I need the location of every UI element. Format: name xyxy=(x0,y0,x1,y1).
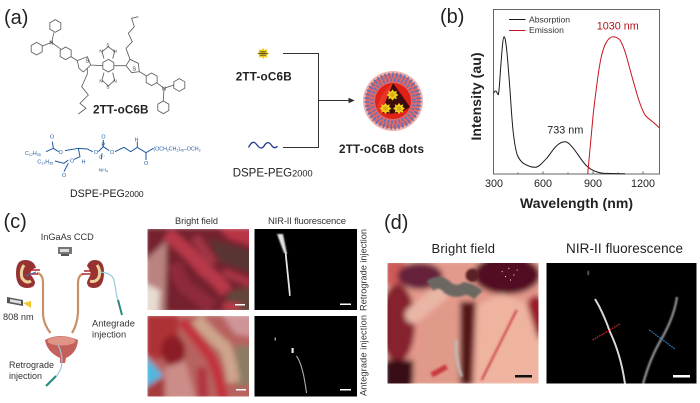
chemical structure: 2TT-oC6B: N xyxy=(99,49,103,54)
photo: NIR antegrade xyxy=(254,316,357,396)
ureter signal left xyxy=(595,299,625,384)
chemical structure: DSPE-PEG2000: O xyxy=(70,159,74,165)
label: Retrograde injection: Retrograde xyxy=(9,360,54,370)
ureter right xyxy=(72,274,83,333)
chemical structure: DSPE-PEG2000: H xyxy=(33,151,37,157)
emission curve xyxy=(588,37,659,174)
chemical structure: 2TT-oC6B: N xyxy=(162,87,166,93)
absorption curve xyxy=(494,37,625,174)
chemical structure: 2TT-oC6B: S xyxy=(106,85,109,90)
chemical structure: DSPE-PEG2000: 35 xyxy=(49,161,53,165)
chart frame and ticks xyxy=(494,10,660,174)
ureter left xyxy=(37,273,50,333)
chemical structure: DSPE-PEG2000: NH xyxy=(99,168,106,174)
panel label (d): (d) xyxy=(384,212,408,234)
icon: 2TT-oC6B molecule star xyxy=(257,48,269,59)
icon: CCD camera xyxy=(58,247,72,256)
chemical structure: DSPE-PEG2000: O xyxy=(94,150,98,156)
chemical structure: 2TT-oC6B: N xyxy=(113,79,117,84)
chemical structure: DSPE-PEG2000: H xyxy=(82,159,86,165)
x axis title: Wavelength (nm) xyxy=(520,195,633,211)
chemical structure: DSPE-PEG2000: ) xyxy=(178,147,180,153)
scale bar xyxy=(340,389,351,390)
chemical structure: DSPE-PEG2000: C xyxy=(37,159,41,165)
chemical structure: DSPE-PEG2000: 3 xyxy=(199,149,201,153)
chemical structure: 2TT-oC6B: S xyxy=(132,67,136,73)
label: DSPE-PEG2000: DSPE-PEG2000 xyxy=(233,168,313,180)
compound name: DSPE-PEG2000: DSPE-PEG2000 xyxy=(70,188,144,200)
chemical structure: DSPE-PEG2000: H xyxy=(45,159,49,165)
chemical structure: DSPE-PEG2000: 45 xyxy=(180,149,184,153)
photo: bright field xyxy=(388,263,538,384)
panel: (a) synthesis scheme xyxy=(4,7,424,200)
chemical structure: DSPE-PEG2000: O xyxy=(62,173,66,179)
peak label: 1030 nm: 1030 nm xyxy=(597,20,639,32)
x tick labels: 300 xyxy=(485,178,503,190)
arrow: bracket merging both components into dots xyxy=(283,54,354,148)
heading: NIR-II fluorescence: NIR-II fluorescence xyxy=(566,241,683,256)
photo: NIR retrograde xyxy=(254,229,357,310)
heading: Bright field: Bright field xyxy=(432,241,495,256)
compound name: 2TT-oC6B: 2TT-oC6B xyxy=(93,104,148,116)
chemical structure: 2TT-oC6B xyxy=(31,17,185,114)
chemical structure: DSPE-PEG2000: 17 xyxy=(29,153,33,157)
ureter clump xyxy=(430,283,478,295)
column heading: NIR-II fluorescence: NIR-II fluorescence xyxy=(268,216,346,227)
chemical structure: DSPE-PEG2000: P xyxy=(101,143,105,149)
chemical structure: DSPE-PEG2000: O xyxy=(144,161,148,167)
chemical structure: DSPE-PEG2000 xyxy=(25,135,201,179)
label: 2TT-oC6B dots: 2TT-oC6B dots xyxy=(339,143,424,156)
x tick labels: 900 xyxy=(584,178,602,190)
chemical structure: DSPE-PEG2000: 35 xyxy=(37,153,41,157)
chemical structure: 2TT-oC6B: N xyxy=(49,40,53,46)
x tick labels xyxy=(485,178,655,190)
chemical structure: DSPE-PEG2000: –OCH xyxy=(184,147,199,153)
chemical structure: DSPE-PEG2000: 2 xyxy=(167,149,169,153)
x tick labels: 1200 xyxy=(631,178,655,190)
chemical structure: DSPE-PEG2000: (OCH xyxy=(153,147,167,153)
label: Antegrade injection: Antegrade xyxy=(92,319,135,329)
icon: 808 nm laser xyxy=(7,297,31,308)
chemical structure: DSPE-PEG2000: O xyxy=(101,135,105,141)
rotated label: Retrograde injection: Retrograde injection xyxy=(359,229,369,311)
legend: Emission xyxy=(529,25,564,35)
ureter signal right xyxy=(643,297,677,384)
chemical structure: DSPE-PEG2000: C xyxy=(25,151,29,157)
icon: 2TT-oC6B dot nanoparticle xyxy=(363,71,423,131)
chemical structure: 2TT-oC6B: S xyxy=(85,58,89,64)
chemical structure: DSPE-PEG2000: 2 xyxy=(177,149,179,153)
chemical structure: DSPE-PEG2000: O xyxy=(50,135,54,141)
panel label (c): (c) xyxy=(4,211,27,233)
rotated label: Antegrade injection: Antegrade injection xyxy=(359,315,369,396)
urinary system illustration xyxy=(7,260,122,386)
x tick labels: 600 xyxy=(534,178,552,190)
icon: DSPE-PEG wave xyxy=(248,142,278,148)
scale bar xyxy=(235,304,245,306)
spot xyxy=(587,270,589,276)
chemical structure: 2TT-oC6B: S xyxy=(106,43,109,48)
photo: bright field retrograde xyxy=(148,229,249,310)
scale bar xyxy=(673,375,690,378)
chemical structure: DSPE-PEG2000: CH xyxy=(169,147,177,153)
antegrade catheter xyxy=(100,272,121,312)
kidney left xyxy=(16,260,36,288)
label: 808 nm: 808 nm xyxy=(3,312,34,322)
panel label (a): (a) xyxy=(4,7,28,29)
kidney right xyxy=(87,260,104,288)
chemical structure: DSPE-PEG2000: O xyxy=(59,150,63,156)
chemical structure: DSPE-PEG2000: 4 xyxy=(106,170,108,174)
chemical structure: DSPE-PEG2000: O xyxy=(110,150,114,156)
label: Antegrade injection: injection xyxy=(92,330,126,340)
chemical structure: DSPE-PEG2000: H xyxy=(135,138,139,144)
bladder xyxy=(45,336,78,363)
panel label (b): (b) xyxy=(440,6,464,28)
panel: (b) spectra chart xyxy=(440,6,660,211)
panel: (c) ureter imaging setup and images xyxy=(3,211,369,401)
dotted cross-section red xyxy=(593,324,620,340)
label: 2TT-oC6B: 2TT-oC6B xyxy=(236,71,292,84)
scale bar xyxy=(236,389,246,390)
retrograde catheter xyxy=(47,345,62,386)
chemical structure: DSPE-PEG2000: 17 xyxy=(41,161,45,165)
scale bar xyxy=(340,304,351,305)
chemical structure: 2TT-oC6B: N xyxy=(99,79,103,84)
legend: Absorption xyxy=(529,14,570,24)
y axis title: Intensity (au) xyxy=(468,52,484,140)
photo: NIR-II fluorescence xyxy=(546,263,696,384)
photo: bright field antegrade xyxy=(148,316,249,396)
scale bar xyxy=(515,375,532,378)
peak label: 733 nm: 733 nm xyxy=(547,124,583,136)
label: Retrograde injection: injection xyxy=(9,371,42,381)
dotted cross-section blue xyxy=(649,330,675,349)
legend xyxy=(509,14,570,35)
chemical structure: 2TT-oC6B: N xyxy=(113,49,117,54)
panel: (d) ureter bright field and NIR-II xyxy=(380,212,696,388)
column heading: Bright field: Bright field xyxy=(175,216,218,226)
chemical structure: DSPE-PEG2000: O⁻ xyxy=(99,155,106,161)
label: InGaAs CCD: InGaAs CCD xyxy=(41,232,94,242)
